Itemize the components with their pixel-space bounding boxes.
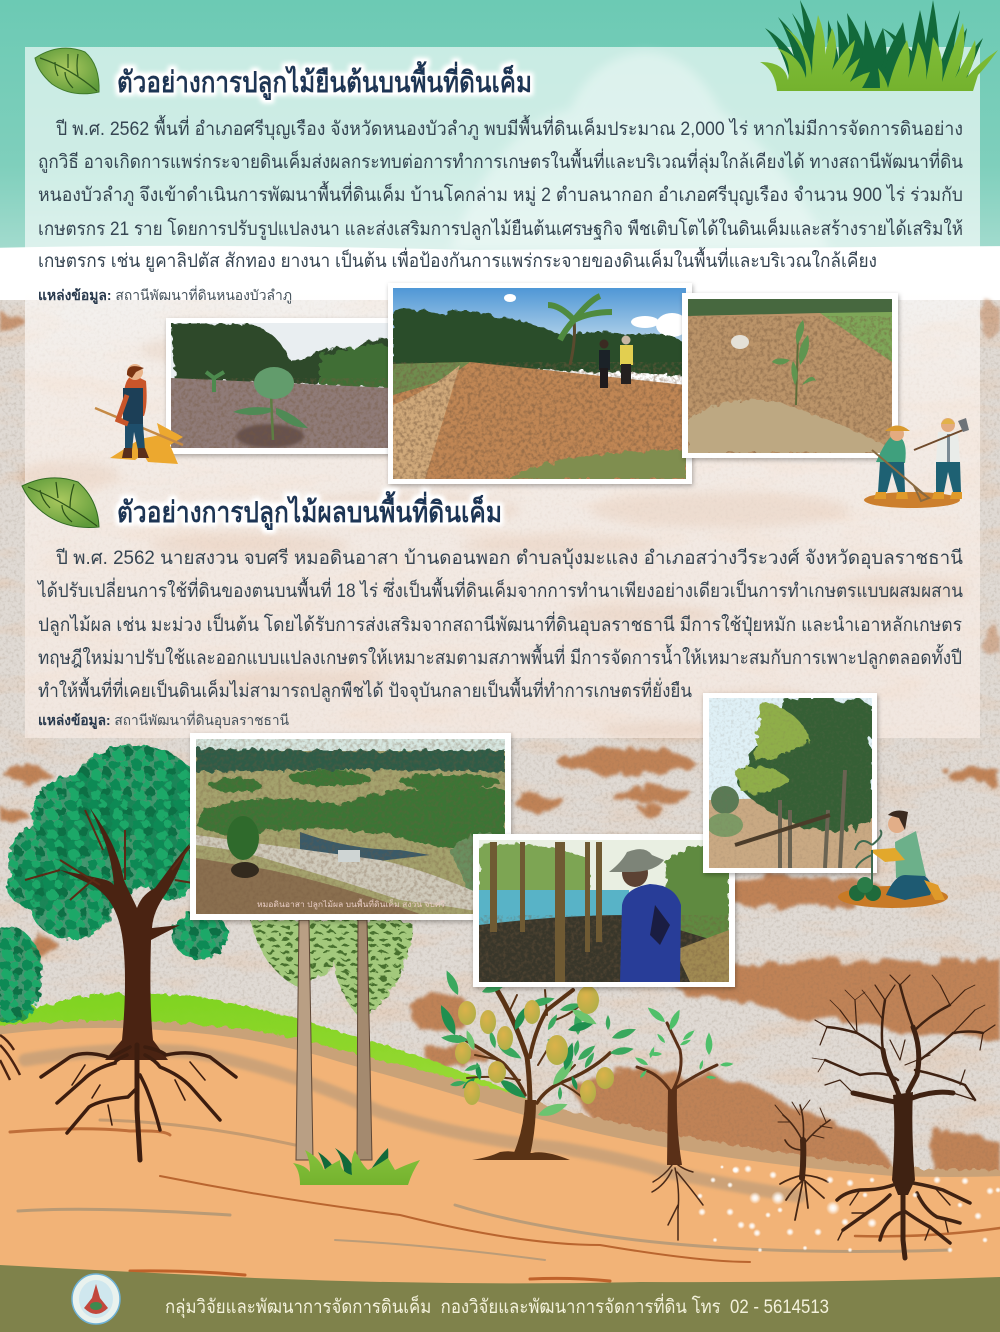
text block: second section paragraph [36,547,963,703]
ground shading streaks [10,1050,1000,1281]
footer logo [72,1274,120,1324]
text block: second section paragraph: ทำให้พื้นที่ที่เคยเป็นดินเค็มไม่สามารถปลูกพืชได้ ปัจจุบันกลายเป็นพื้นที่ทำการเกษตรที่ยั่งยืน [38,677,692,703]
salt sparkles in ground [697,1165,1000,1253]
heading: first section: ตัวอย่างการปลูกไม้ยืนต้นบนพื้นที่ดินเค็ม [117,60,532,100]
source: second section: แหล่งข้อมูล: สถานีพัฒนาที่ดินอุบลราชธานี [38,711,289,729]
text block: second section paragraph: ปี พ.ศ. 2562 นายสงวน จบศรี หมอดินอาสา บ้านดอนพอก ตำบลบุ้งมะแลง อำเภอสว่างวีระวงศ์ จังหวัดอุบลราชธานี [55,547,963,570]
illustration: two tall trees [250,920,413,1160]
green grass slope [0,993,610,1200]
illustration: young tree with sparse leaves [634,1005,734,1240]
tan ground edge [0,1020,1000,1200]
background: white clouds [0,52,1000,310]
source: first section: แหล่งข้อมูล: สถานีพัฒนาที่ดินหนองบัวลำภู [38,286,292,304]
icon: leaf two [22,478,99,528]
photo: farmer in blue shirt among trees [473,834,735,987]
illustration: farmer with shovel [95,364,183,464]
photo: mango tree [703,693,877,873]
background: salt soil [0,300,1000,1200]
heading: second section: ตัวอย่างการปลูกไม้ผลบนพื้นที่ดินเค็ม [117,490,502,530]
photo: seedling on grey soil [166,318,398,454]
illustration: partial tree at left edge [0,927,42,1080]
photo: aerial view of mixed farm: หมอดินอาสา ปลูกไม้ผล บนพื้นที่ดินเค็ม สงวน จบศรี [257,898,446,910]
illustration: grass tuft [293,1148,420,1185]
panel: translucent text background [25,47,980,738]
text block: first section paragraph: เกษตรกร เช่น ยูคาลิปตัส สักทอง ยางนา เป็นต้น เพื่อป้องกันการแพร่กระจายของดินเค็มในพื้นที่และบริเวณใกล้เคียง [38,247,877,272]
illustration: mango tree [437,969,637,1160]
illustration: small bare tree [775,1100,832,1220]
footer band [0,1265,1000,1332]
illustration: kneeling farmer with watermelons [838,811,948,908]
orange ground [0,1028,1000,1300]
photo: aerial view of mixed farm [190,733,511,920]
text block: first section paragraph [38,115,963,272]
illustration: two farmers with rake and hoe [864,418,969,508]
background: sky [0,0,1000,255]
illustration: large bare tree with roots [812,975,995,1258]
footer text: กลุ่มวิจัยและพัฒนาการจัดการดินเค็ม กองวิจัยและพัฒนาการจัดการที่ดิน โทร 02 - 5614513 [165,1293,829,1319]
photo: sapling on straw-mulched mound [682,293,898,458]
photo: ploughed field with two people [388,283,692,484]
decorative grass top right [760,0,998,91]
icon: leaf one [35,48,99,94]
illustration: large leafy tree with roots [7,745,236,1160]
